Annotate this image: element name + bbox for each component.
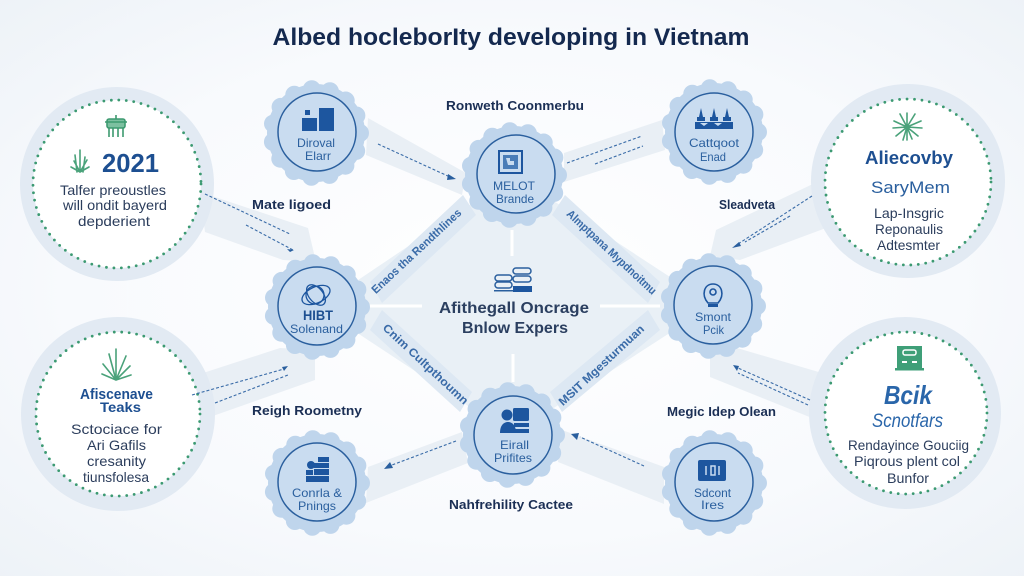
medallion: Eirall Prifites: [463, 386, 561, 484]
central heading: Afithegall Oncrage: [439, 300, 589, 317]
central white cross lines: [368, 230, 660, 382]
description: [60, 182, 167, 229]
arrow: bottom left circle to HIBT: [192, 366, 288, 403]
icon: green plant: [71, 150, 89, 172]
big circle: bottom right: [809, 317, 1001, 509]
label: Sleadveta: Sleadveta: [719, 198, 776, 212]
icon: green device: [105, 115, 127, 137]
subheading: Scnotfars: [872, 411, 943, 432]
description: tiunsfolesa: [83, 469, 149, 485]
description: Reponaulis: [875, 221, 943, 237]
icon: light bulb: [704, 284, 722, 307]
medallion: Conrla and Pnings: [268, 434, 366, 532]
description: Lap-Insgric: [874, 205, 944, 221]
arrow: MELOT to Cattqoot: [567, 136, 643, 164]
diagonal label: lower right: MSIT Mgesturmuan: [557, 323, 647, 408]
icon: green plant: [102, 349, 131, 380]
connector bands: [200, 118, 826, 504]
year: 2021: [102, 148, 159, 178]
label: HIBT: [303, 307, 333, 323]
label: Nahfrehility Cactee: Nahfrehility Cactee: [449, 498, 573, 512]
title: Albed hocleborIty developing in Vietnam: [272, 24, 750, 51]
big circle: top right: [811, 84, 1005, 278]
central heading: Bnlow Expers: [462, 320, 568, 337]
medallion: Cattqoot Enad: [665, 83, 763, 181]
label: Solenand: [290, 322, 343, 336]
description: Sctociace for: [71, 421, 162, 437]
arrow: Sdcont to Eirall: [571, 433, 644, 466]
description: Adtesmter: [877, 237, 940, 253]
description: [848, 437, 969, 486]
description: depderient: [78, 213, 150, 229]
icon: badge: [698, 460, 726, 481]
arrow: top left circle to HIBT: [205, 194, 294, 252]
label: [494, 438, 532, 465]
arrow: Eirall to Conrla: [384, 441, 456, 469]
icon: knot: [299, 281, 333, 309]
label: [695, 310, 732, 337]
label: Megic Idep Olean: Megic Idep Olean: [667, 405, 776, 419]
medallion: HIBT Solenand: [268, 258, 366, 356]
label: Reigh Roometny: Reigh Roometny: [252, 404, 362, 418]
description: Piqrous plent col: [854, 453, 960, 469]
label: Pnings: [298, 499, 336, 513]
central diamond panel: [318, 175, 713, 435]
icon: stacked items: [306, 457, 329, 482]
subheading: SaryMem: [871, 178, 950, 197]
heading: Aliecovby: [865, 148, 953, 168]
icon: three people: [695, 108, 733, 129]
diagonal label: upper left: Enaos tha Rendthlines: [370, 207, 464, 296]
description: Bunfor: [887, 470, 929, 486]
label: Diroval: [297, 136, 335, 150]
big circle: bottom left: [21, 317, 215, 511]
label: [493, 179, 536, 206]
description: cresanity: [87, 453, 146, 469]
diagonal label: lower left: Cnim Cultpthoumn: [380, 322, 470, 407]
diagonal label: upper right: Almptpana Mypdnoitmu: [564, 208, 658, 297]
icon: person at screen: [500, 408, 529, 433]
description: Talfer preoustles: [60, 182, 166, 198]
arrow: bottom right circle to Smont: [733, 365, 810, 405]
medallion: Smont Pcik: [664, 257, 762, 355]
label: Sdcont: [694, 486, 732, 500]
label: Eirall: [500, 438, 529, 452]
label: [297, 136, 335, 163]
label: Ronweth Coonmerbu: Ronweth Coonmerbu: [446, 99, 584, 113]
label: Enad: [700, 150, 726, 164]
label: Conrla &: [292, 486, 342, 500]
big circle: top left: [20, 87, 214, 281]
label: Mate ligoed: Mate ligoed: [252, 198, 331, 212]
icon: buildings: [302, 108, 334, 131]
description: [874, 205, 944, 253]
heading: Bcik: [884, 380, 933, 410]
label: Pcik: [703, 323, 725, 337]
label: Prifites: [494, 451, 532, 465]
label: Brande: [496, 192, 534, 206]
description: will ondit bayerd: [62, 197, 167, 213]
arrow: Droval to MELOT: [378, 144, 456, 180]
medallion: MELOT Brande: [465, 126, 563, 224]
heading: Afiscenave: [80, 387, 153, 403]
description: [71, 421, 162, 485]
label: [292, 486, 342, 513]
label: [290, 307, 343, 336]
icon: framed chip: [499, 151, 522, 173]
description: Rendayince Gouciig: [848, 437, 969, 453]
heading: Teaks: [100, 400, 141, 415]
heading: [80, 387, 153, 415]
icon: green terminal: [895, 346, 924, 370]
label: Smont: [695, 310, 732, 324]
central heading: [439, 300, 589, 337]
arrow: top right circle to Smont: [732, 196, 812, 248]
medallion: Droval Elarr: [267, 84, 365, 182]
description: Ari Gafils: [87, 437, 146, 453]
label: [694, 486, 732, 512]
label: MELOT: [493, 179, 536, 193]
label: Cattqoot: [689, 136, 740, 150]
label: [689, 136, 740, 164]
icon: green plant: [893, 113, 922, 140]
label: Ires: [701, 498, 724, 512]
medallion: Sdcont Ires: [665, 434, 763, 532]
central icon: stacked layers: [494, 268, 532, 292]
label: Elarr: [305, 149, 331, 163]
